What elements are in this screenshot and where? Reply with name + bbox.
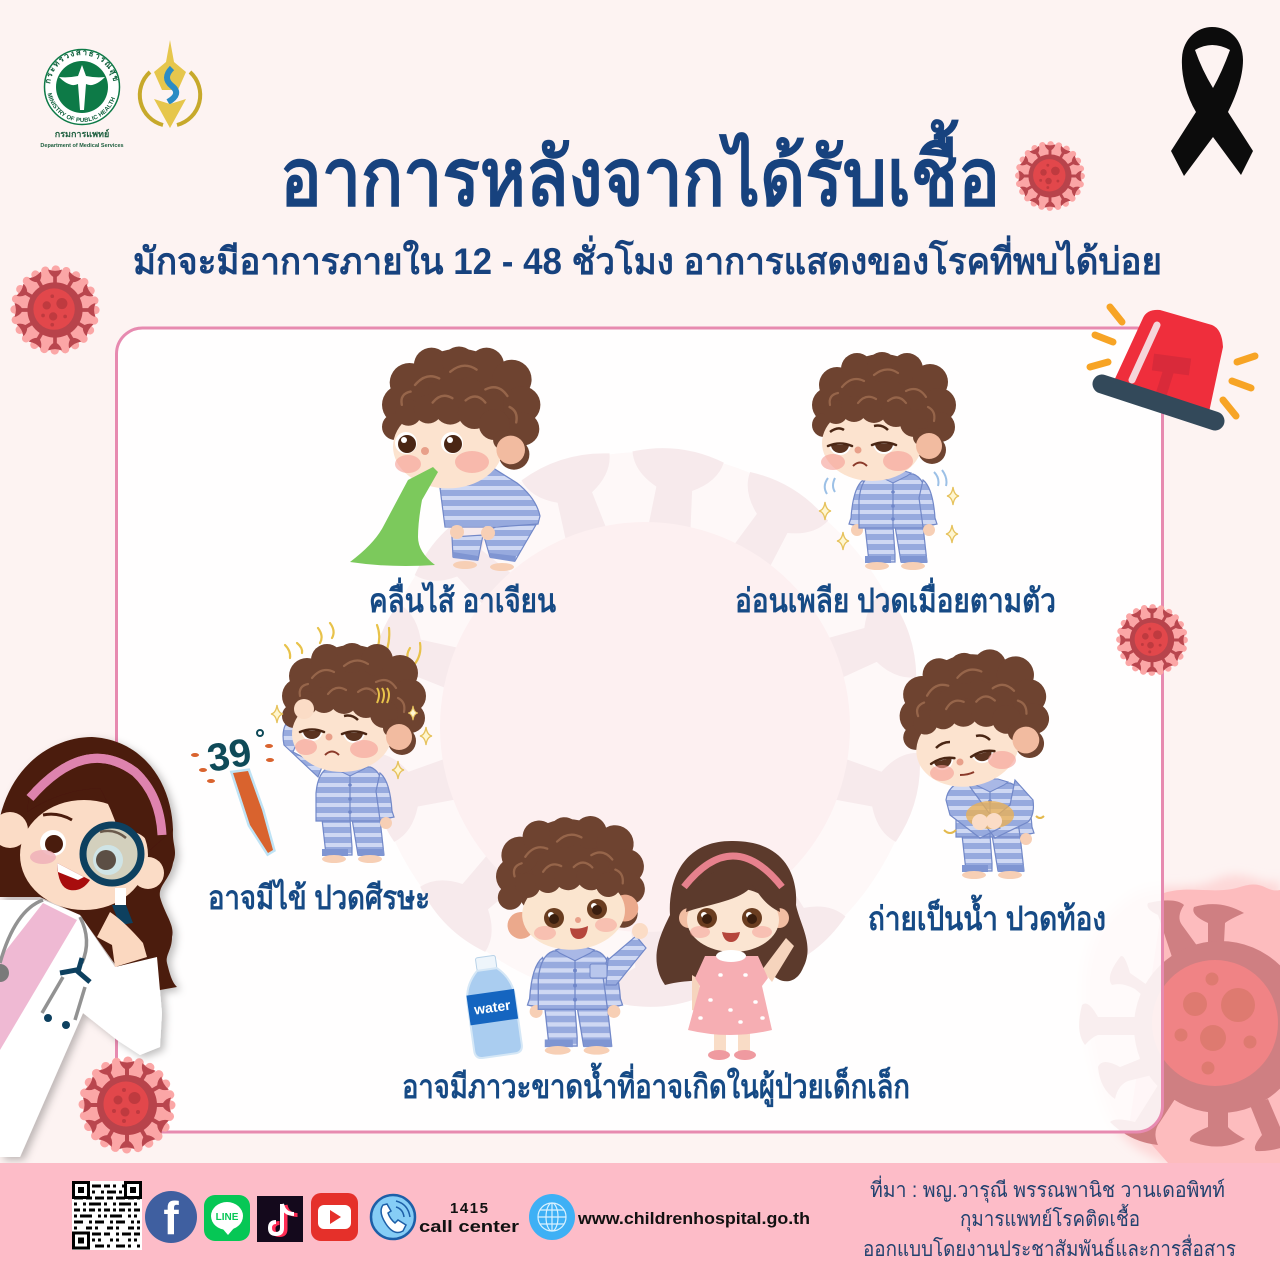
- source credits: [863, 1175, 1236, 1261]
- phone icon: [371, 1195, 415, 1239]
- caption: อาจมีภาวะขาดน้ำที่อาจเกิดในผู้ป่วยเด็กเล็ก: [402, 1062, 910, 1108]
- symptom: fever and headache: [191, 623, 432, 916]
- call center text: 1415: [450, 1200, 488, 1217]
- hair: [0, 737, 177, 990]
- thermometer: [191, 730, 274, 853]
- black mourning ribbon: [1171, 27, 1253, 176]
- tiktok icon: [257, 1196, 303, 1242]
- logo: ministry of public health: [40, 48, 124, 149]
- boy bending forward: [382, 346, 540, 571]
- caption: ถ่ายเป็นน้ำ ปวดท้อง: [868, 894, 1106, 937]
- symptom: fatigue and body aches: [735, 352, 1056, 619]
- line icon: [204, 1195, 250, 1241]
- facebook icon: f: [163, 1192, 179, 1244]
- source credits: ที่มา : พญ.วารุณี พรรณพานิช วานเดอพิทท์: [870, 1175, 1225, 1203]
- facebook icon: [145, 1191, 197, 1244]
- symptom: dehydration in young children: [402, 811, 910, 1108]
- call center text: [419, 1200, 519, 1236]
- girl waving: [656, 841, 808, 1060]
- boy standing tired: [812, 352, 956, 570]
- qr code: [72, 1181, 142, 1250]
- source credits: กุมารแพทย์โรคติดเชื้อ: [960, 1204, 1140, 1232]
- headband: [30, 758, 162, 835]
- lab coat: [0, 900, 162, 1157]
- alarm light: [1090, 307, 1255, 421]
- youtube icon: [311, 1193, 358, 1241]
- title: อาการหลังจากได้รับเชื้อ: [280, 119, 1000, 222]
- logo: medical services emblem: [140, 40, 200, 128]
- subtitle: มักจะมีอาการภายใน 12 - 48 ชั่วโมง อาการแสดงของโรคที่พบได้บ่อย: [133, 235, 1162, 282]
- source credits: ออกแบบโดยงานประชาสัมพันธ์และการสื่อสาร: [863, 1234, 1236, 1261]
- blouse: [0, 903, 77, 1050]
- watermark virus: [363, 443, 927, 1008]
- globe icon: [529, 1194, 575, 1240]
- caption: อาจมีไข้ ปวดศีรษะ: [208, 878, 430, 916]
- caption: อ่อนเพลีย ปวดเมื่อยตามตัว: [735, 577, 1056, 619]
- boy holding stomach: [890, 640, 1060, 879]
- symptom: nausea and vomiting: [350, 346, 556, 619]
- water bottle: water: [472, 997, 512, 1018]
- website: www.childrenhospital.go.th: [577, 1209, 810, 1228]
- logo: ministry of public health: Department of Medical Services: [40, 143, 124, 149]
- logo: ministry of public health: กรมการแพทย์: [55, 128, 109, 139]
- doctor with magnifying glass: [0, 737, 177, 1157]
- line icon: LINE: [216, 1212, 239, 1223]
- boy waving: [491, 811, 651, 1055]
- hand: [97, 912, 147, 967]
- boy with hand on forehead: [271, 643, 432, 863]
- heat lines: [285, 623, 420, 667]
- title virus: [1018, 144, 1082, 208]
- caption: คลื่นไส้ อาเจียน: [369, 577, 556, 619]
- thermometer: 39: [204, 731, 255, 781]
- symptom: diarrhea and stomach ache: [868, 640, 1106, 937]
- water bottle: [461, 953, 523, 1059]
- stethoscope: [0, 900, 87, 1020]
- logo: ministry of public health: กระทรวงสาธารณสุข: [46, 50, 118, 84]
- vomit: [350, 467, 438, 566]
- sparkles: [819, 470, 959, 550]
- call center text: call center: [419, 1217, 519, 1236]
- footer band: [0, 1163, 1280, 1280]
- left virus: [15, 270, 95, 350]
- large corner virus: [1079, 875, 1280, 1165]
- face: [20, 800, 148, 910]
- logo: ministry of public health: MINISTRY OF PUBLIC HEALTH: [48, 92, 115, 122]
- right virus: [1119, 607, 1185, 673]
- magnifying glass: [83, 825, 141, 925]
- bottom left virus: [83, 1061, 171, 1149]
- white content panel: [116, 328, 1162, 1132]
